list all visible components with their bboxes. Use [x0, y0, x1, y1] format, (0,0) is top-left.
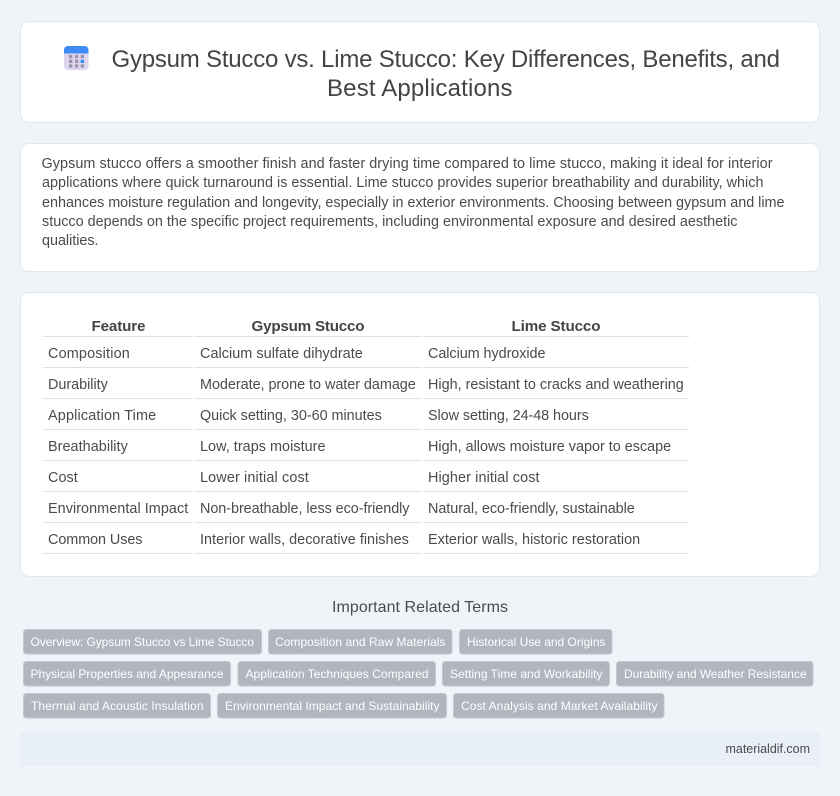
tag — [442, 662, 610, 686]
intro text — [42, 156, 784, 249]
tag — [238, 662, 436, 686]
row: cost: Cost — [48, 470, 78, 486]
comparison table panel — [20, 292, 820, 576]
intro text: enhances moisture regulation and longevity, especially in exterior environments. Choosing between gypsum and lime — [42, 195, 784, 211]
intro text: applications where quick turnaround is essential. Lime stucco provides superior breathability and durability, which — [42, 175, 764, 191]
row: breathability — [48, 439, 671, 455]
row: common uses: Exterior walls, historic restoration — [428, 532, 640, 548]
row: composition: Calcium hydroxide — [428, 346, 546, 362]
row: durability: Moderate, prone to water damage — [200, 377, 416, 393]
row: cost: Higher initial cost — [428, 470, 540, 486]
row: cost: Lower initial cost — [200, 470, 309, 486]
icon: calendar grid — [64, 46, 88, 70]
tag: Environmental Impact and Sustainability — [225, 699, 440, 713]
header panel — [20, 22, 820, 122]
row: environmental impact — [48, 501, 635, 517]
related terms heading: Important Related Terms — [332, 599, 508, 616]
title: Gypsum Stucco vs. Lime Stucco: Key Differences, Benefits, and — [112, 46, 780, 73]
row: common uses: Interior walls, decorative finishes — [200, 532, 409, 548]
intro text: stucco depends on the specific project requirements, including environmental exposure and desired aesthetic — [42, 214, 738, 230]
row: environmental impact: Non-breathable, less eco-friendly — [200, 501, 410, 517]
tag: Overview: Gypsum Stucco vs Lime Stucco — [30, 635, 254, 649]
tag — [218, 694, 446, 718]
footer bar — [20, 732, 820, 766]
row: breathability: Low, traps moisture — [200, 439, 326, 455]
table header: Feature — [92, 318, 146, 335]
row: breathability: High, allows moisture vapor to escape — [428, 439, 671, 455]
tag — [268, 630, 452, 654]
tag — [24, 694, 210, 718]
tag: Setting Time and Workability — [450, 667, 602, 681]
title: Best Applications — [327, 75, 512, 102]
row: environmental impact: Environmental Impact — [48, 501, 188, 517]
row: application time — [48, 408, 589, 424]
table header: Gypsum Stucco — [252, 318, 364, 335]
row: common uses: Common Uses — [48, 532, 142, 548]
tag — [460, 630, 612, 654]
footer source: materialdif.com — [726, 742, 810, 756]
tag: Thermal and Acoustic Insulation — [31, 699, 204, 713]
table header: Lime Stucco — [512, 318, 600, 335]
tag: Cost Analysis and Market Availability — [461, 699, 658, 713]
table header — [92, 318, 600, 335]
row: durability: Durability — [48, 377, 109, 393]
tag — [24, 662, 230, 686]
tag — [616, 662, 813, 686]
tag: Composition and Raw Materials — [275, 635, 446, 649]
title — [112, 46, 780, 102]
tag — [454, 694, 664, 718]
tag — [24, 630, 262, 654]
row: application time: Application Time — [48, 408, 156, 424]
row: composition: Composition — [48, 346, 130, 362]
row: durability: High, resistant to cracks and weathering — [428, 377, 684, 393]
row: common uses — [48, 532, 640, 548]
tag: Physical Properties and Appearance — [30, 667, 224, 681]
intro text: qualities. — [42, 233, 98, 249]
intro text: Gypsum stucco offers a smoother finish and faster drying time compared to lime stucco, making it ideal for interior — [42, 156, 773, 172]
row: application time: Slow setting, 24-48 hours — [428, 408, 589, 424]
row: cost — [48, 470, 540, 486]
tag: Historical Use and Origins — [467, 635, 606, 649]
row: durability — [48, 377, 684, 393]
tag: Application Techniques Compared — [246, 667, 428, 681]
row: environmental impact: Natural, eco-friendly, sustainable — [428, 501, 635, 517]
row: composition: Calcium sulfate dihydrate — [200, 346, 363, 362]
row: composition — [48, 346, 546, 362]
related terms tags — [24, 630, 813, 718]
intro panel — [20, 144, 820, 272]
row: breathability: Breathability — [48, 439, 129, 455]
tag: Durability and Weather Resistance — [624, 667, 807, 681]
row: application time: Quick setting, 30-60 minutes — [200, 408, 382, 424]
